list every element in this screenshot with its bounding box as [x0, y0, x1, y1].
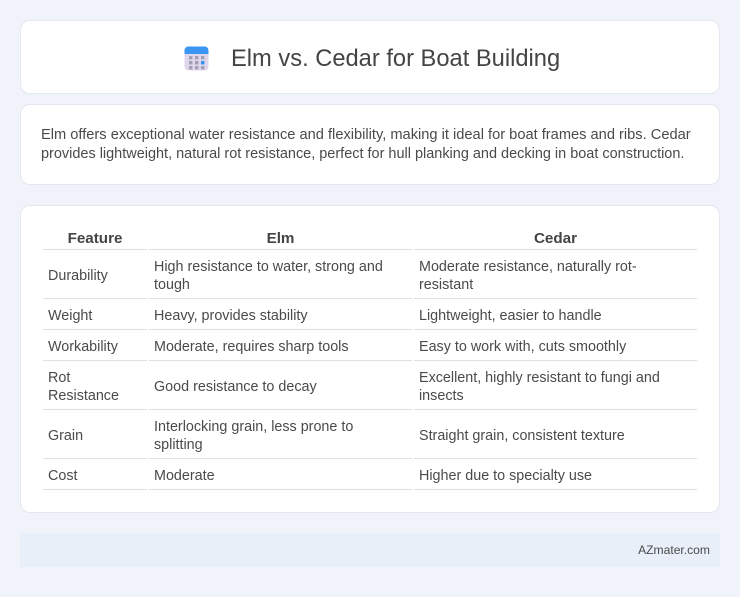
- row: durability: Durability: [48, 268, 108, 284]
- row: rot resistance: insects: [419, 388, 464, 404]
- summary text: Elm offers exceptional water resistance and flexibility, making it ideal for boat frames and ribs. Cedar: [41, 127, 691, 143]
- title: Elm vs. Cedar for Boat Building: [231, 46, 560, 72]
- row: weight: [48, 308, 602, 324]
- row: rot resistance: Resistance: [48, 388, 119, 404]
- row: workability: Moderate, requires sharp tools: [154, 339, 349, 355]
- row: weight: Weight: [48, 308, 92, 324]
- row: grain: splitting: [154, 437, 203, 453]
- table header: Cedar: [534, 230, 577, 247]
- row: weight: Lightweight, easier to handle: [419, 308, 602, 324]
- table header: [68, 230, 577, 247]
- footer bar: [20, 533, 720, 567]
- row: grain: Interlocking grain, less prone to: [154, 419, 353, 435]
- row: rot resistance: Excellent, highly resistant to fungi and: [419, 370, 660, 386]
- row: rot resistance: Good resistance to decay: [154, 379, 317, 395]
- row: cost: Moderate: [154, 468, 215, 484]
- row: durability: tough: [154, 277, 190, 293]
- row: durability: High resistance to water, strong and: [154, 259, 383, 275]
- icon: calendar: [184, 46, 208, 70]
- panel: summary: [20, 104, 720, 185]
- summary text: [41, 127, 691, 162]
- panel: comparison table: [20, 205, 720, 513]
- row: weight: Heavy, provides stability: [154, 308, 308, 324]
- row: rot resistance: Rot: [48, 370, 70, 386]
- table header: Elm: [267, 230, 294, 247]
- footer credit: AZmater.com: [638, 543, 710, 557]
- row: cost: Higher due to specialty use: [419, 468, 592, 484]
- row: durability: [48, 259, 637, 293]
- row: cost: Cost: [48, 468, 78, 484]
- row: grain: Grain: [48, 428, 83, 444]
- row: grain: [48, 419, 625, 453]
- row: workability: Workability: [48, 339, 118, 355]
- row: durability: Moderate resistance, naturally rot-: [419, 259, 637, 275]
- row: workability: Easy to work with, cuts smoothly: [419, 339, 626, 355]
- panel: title card: [20, 20, 720, 94]
- row: rot resistance: [48, 370, 660, 404]
- row: workability: [48, 339, 626, 355]
- row: durability: resistant: [419, 277, 473, 293]
- summary text: provides lightweight, natural rot resistance, perfect for hull planking and decking in boat construction.: [41, 146, 684, 162]
- row: cost: [48, 468, 592, 484]
- table header: Feature: [68, 230, 122, 247]
- row: grain: Straight grain, consistent texture: [419, 428, 625, 444]
